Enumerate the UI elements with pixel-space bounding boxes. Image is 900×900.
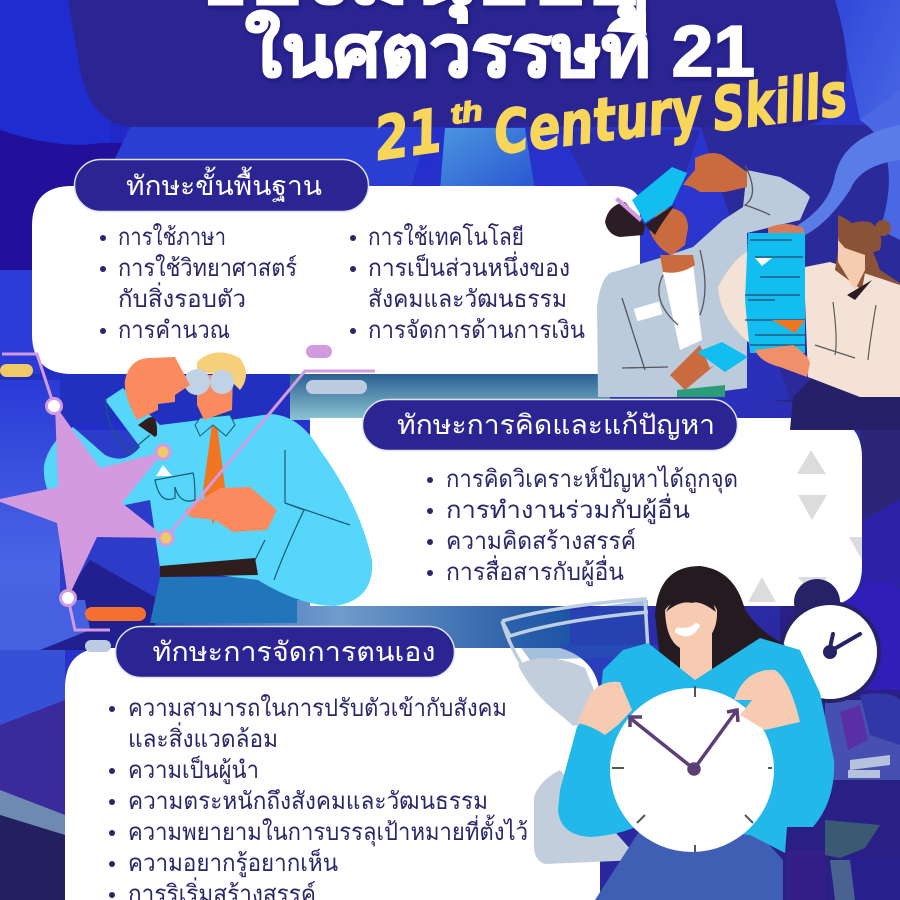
title text: ในศตวรรษที่ 21 <box>245 0 755 92</box>
script subtitle: 21th Century Skills: Skills <box>708 60 851 146</box>
clock hands <box>630 710 738 774</box>
panel: self management card <box>65 626 600 900</box>
list: self management skills: และสิ่งแวดล้อม <box>128 722 278 753</box>
list: basic skills right column: การจัดการด้านการเงิน <box>368 317 585 344</box>
man figure <box>44 352 372 623</box>
panel: basic skills card <box>32 160 640 374</box>
list: thinking skills <box>427 465 738 587</box>
heading: self management: ทักษะการจัดการตนเอง <box>152 637 436 667</box>
list: thinking skills: การสื่อสารกับผู้อื่น <box>446 555 624 587</box>
heading: thinking and problem solving: ทักษะการคิดและแก้ปัญหา <box>397 410 715 440</box>
list: thinking skills: การคิดวิเคราะห์ปัญหาได้ถูกจุด <box>446 465 738 494</box>
illustration: woman with clock <box>558 566 834 900</box>
illustration: man with glasses and star <box>0 345 375 652</box>
star connector line <box>166 371 375 538</box>
list: basic skills right column: การเป็นส่วนหนึ่งของ <box>368 251 570 282</box>
title panel <box>68 0 847 127</box>
list: basic skills left column <box>100 223 297 344</box>
list: basic skills right column: การใช้เทคโนโลยี <box>368 223 524 251</box>
list: basic skills left column: การใช้ภาษา <box>118 223 226 251</box>
list: basic skills left column: การใช้วิทยาศาสตร์ <box>118 254 297 282</box>
list: self management skills: ความเป็นผู้นำ <box>128 755 259 785</box>
hands <box>577 682 632 735</box>
man in grey jacket <box>597 153 810 397</box>
script subtitle: 21th Century Skills: Century <box>490 74 708 169</box>
list: thinking skills: ความคิดสร้างสรรค์ <box>446 527 636 555</box>
list: thinking skills: การทำงานร่วมกับผู้อื่น <box>446 493 690 525</box>
script subtitle: 21th Century Skills: th <box>449 95 485 130</box>
script subtitle: 21th Century Skills <box>370 60 851 175</box>
heading: basic skills <box>74 160 368 212</box>
list: basic skills left column: กับสิ่งรอบตัว <box>118 282 246 313</box>
heading: self management <box>116 626 454 678</box>
decorative triangles <box>748 450 862 602</box>
list: basic skills right column: สังคมและวัฒนธรรม <box>368 286 567 313</box>
list: self management skills: ความสามารถในการปรับตัวเข้ากับสังคม <box>128 694 507 722</box>
list: basic skills right column <box>350 223 585 344</box>
illustration: alarm clock <box>781 579 879 701</box>
panel: thinking and problem solving card <box>310 400 862 606</box>
script subtitle: 21th Century Skills: 21 <box>370 96 447 175</box>
connector lines and pills <box>0 345 367 652</box>
list: self management skills: ความอยากรู้อยากเห็น <box>128 848 338 878</box>
list: basic skills left column: การคำนวณ <box>118 317 230 344</box>
heading: thinking and problem solving <box>362 400 738 450</box>
woman with paper stack <box>718 215 900 430</box>
heading: basic skills: ทักษะขั้นพื้นฐาน <box>126 166 322 202</box>
star node points <box>46 398 173 606</box>
illustration: man and woman with papers <box>597 153 900 430</box>
star <box>0 405 166 598</box>
list: self management skills <box>109 694 528 900</box>
illustration: hourglass <box>501 599 648 864</box>
list: self management skills: ความตระหนักถึงสังคมและวัฒนธรรม <box>128 788 488 815</box>
list: self management skills: ความพยายามในการบรรลุเป้าหมายที่ตั้งไว้ <box>128 814 528 847</box>
